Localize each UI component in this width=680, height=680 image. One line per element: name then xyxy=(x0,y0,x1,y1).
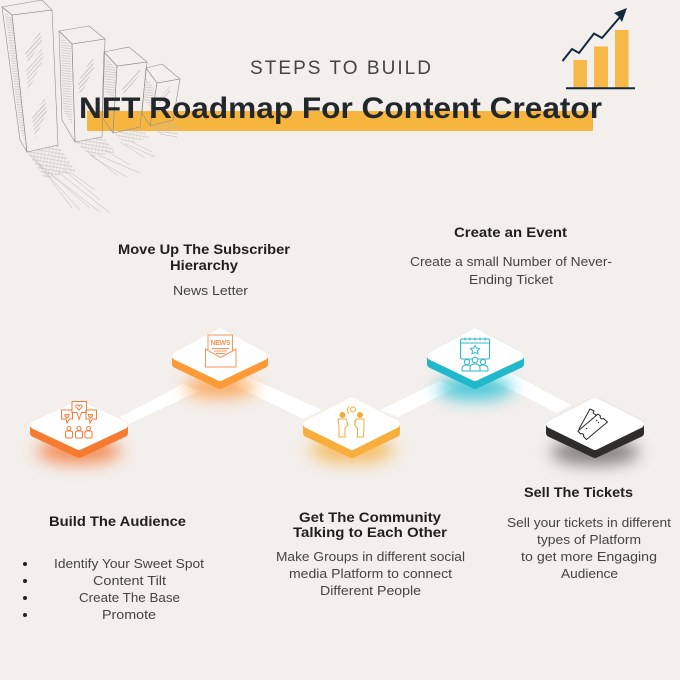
platform side xyxy=(550,401,640,454)
bullet list: Create The Base xyxy=(79,590,180,605)
title highlight band xyxy=(87,111,593,131)
step 4 platform: create an event xyxy=(431,332,520,400)
title: NFT Roadmap For Content Creator xyxy=(79,92,602,125)
platform side xyxy=(307,401,396,454)
glow xyxy=(37,438,121,464)
text: get the community talking: media Platform to connect xyxy=(289,566,452,581)
text: get the community talking: Talking to Each Other xyxy=(293,524,448,540)
sketch of descending 3D bars xyxy=(2,0,180,213)
platform top xyxy=(176,332,264,377)
heading: steps to build: STEPS TO BUILD xyxy=(250,58,431,79)
text: sell the tickets: types of Platform xyxy=(537,532,641,547)
platform top xyxy=(307,401,396,446)
icon: newsletter envelope: NEWS xyxy=(210,340,231,347)
icon: tickets xyxy=(578,409,608,440)
icon: calendar star and crowd xyxy=(460,338,490,371)
icon: two people talking xyxy=(338,406,364,437)
glow xyxy=(184,376,256,398)
bullet list xyxy=(23,556,204,622)
text: create an event: Ending Ticket xyxy=(469,272,553,287)
icon: rising bar chart with arrow xyxy=(562,8,635,88)
platform side xyxy=(431,332,520,385)
platform top xyxy=(431,332,520,377)
bullet list: Identify Your Sweet Spot xyxy=(54,556,204,571)
text: get the community talking: Get The Community xyxy=(299,509,441,525)
bullet list: Content Tilt xyxy=(93,573,166,588)
text: sell the tickets: Sell The Tickets xyxy=(524,484,633,500)
text: create an event: Create an Event xyxy=(454,224,567,240)
glow xyxy=(310,437,394,463)
bar shadows xyxy=(27,120,180,213)
text: create an event xyxy=(410,224,612,287)
bar 1 xyxy=(2,0,58,152)
text: sell the tickets: to get more Engaging xyxy=(521,549,657,564)
text: get the community talking: Different People xyxy=(320,583,421,598)
text: build the audience xyxy=(23,513,204,622)
step 3 platform: community talking xyxy=(307,401,396,463)
bar 2 xyxy=(59,26,105,142)
text: get the community talking: Make Groups in different social xyxy=(276,549,465,564)
bullet list: Promote xyxy=(102,607,156,622)
text: sell the tickets: Sell your tickets in different xyxy=(507,515,671,530)
text: sell the tickets: Audience xyxy=(561,566,618,581)
step 5 platform: sell the tickets xyxy=(550,401,640,465)
platform side xyxy=(176,332,264,385)
platform top xyxy=(550,401,640,446)
platform side xyxy=(34,404,124,454)
text: move up the subscriber hierarchy xyxy=(118,241,291,298)
glow xyxy=(437,376,513,400)
text: get the community talking xyxy=(276,509,465,598)
text: sell the tickets xyxy=(507,484,671,581)
step 2 platform: subscriber hierarchy xyxy=(176,332,264,398)
text: move up the subscriber hierarchy: News Letter xyxy=(173,283,249,298)
bar 3 xyxy=(102,47,147,133)
icon: audience with hearts xyxy=(62,402,96,438)
text: move up the subscriber hierarchy: Hierarchy xyxy=(170,257,238,273)
step 1 platform: build the audience xyxy=(34,402,124,464)
text: create an event: Create a small Number of Never- xyxy=(410,254,612,269)
connector bands between steps xyxy=(120,370,571,425)
bar 4 xyxy=(142,64,180,126)
platform top xyxy=(34,404,124,446)
text: build the audience: Build The Audience xyxy=(49,513,186,529)
glow xyxy=(551,439,639,465)
text: move up the subscriber hierarchy: Move Up The Subscriber xyxy=(118,241,291,257)
